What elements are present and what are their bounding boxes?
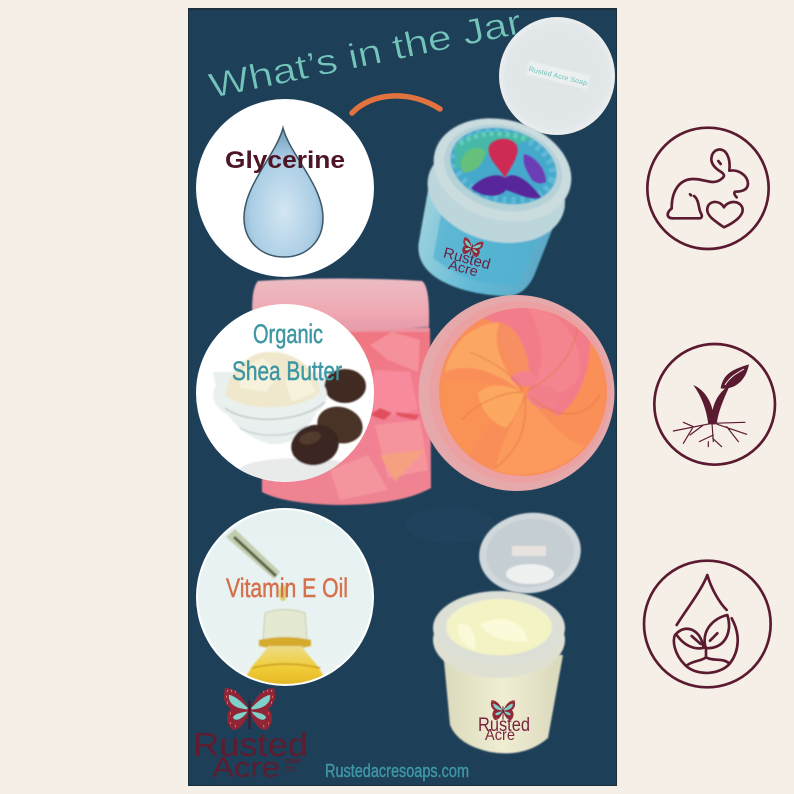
panel: dark blue poster [188,8,617,786]
icon: plant with roots [654,344,775,465]
label: glycerine: Glycerine [225,147,345,174]
brand logo [193,688,308,784]
orange swirl jar top view [418,295,614,491]
frosting swirl [441,300,604,475]
cream frosting [450,599,550,655]
icon: drop with sprout [644,561,771,687]
dropper and oil bottle [226,529,328,690]
blue mermaid jar [402,17,615,310]
mermaid toppings [461,139,546,198]
jar body [443,650,563,753]
jar logo: Rusted [478,715,530,736]
jar logo: Acre [447,256,480,279]
orange arc [352,96,440,113]
jar lid open [499,17,615,135]
icon: water drop [244,128,323,257]
panel: vitamin e circle [196,508,374,690]
label: organic: Organic [253,319,323,349]
website url: Rustedacresoaps.com [325,761,469,781]
logo butterfly [224,688,275,730]
icon: cruelty free rabbit [647,128,769,249]
logo wordmark: Acre [212,752,280,784]
label: vitamin e oil: Vitamin E Oil [226,573,348,603]
jar logo [478,700,530,744]
logo wordmark: CO. [285,767,296,773]
yellow cream jar [433,506,586,753]
logo wordmark: SOAP [285,759,302,765]
panel: shea butter circle [196,304,374,482]
logo wordmark [193,726,308,784]
jar logo [439,233,495,282]
jar logo: Rusted [441,244,492,273]
jar logo: Acre [485,727,515,744]
logo wordmark: Rusted [193,726,308,763]
label: shea butter: Shea Butter [232,356,342,386]
jar body [402,104,583,310]
pink jar side [252,278,431,505]
jar lid open [474,506,586,600]
panel: glycerine circle [196,99,374,277]
shea butter bowl image [213,352,367,482]
title: What’s in the Jar [206,3,525,106]
jar lid open: Rusted Acre Soap [528,66,588,87]
